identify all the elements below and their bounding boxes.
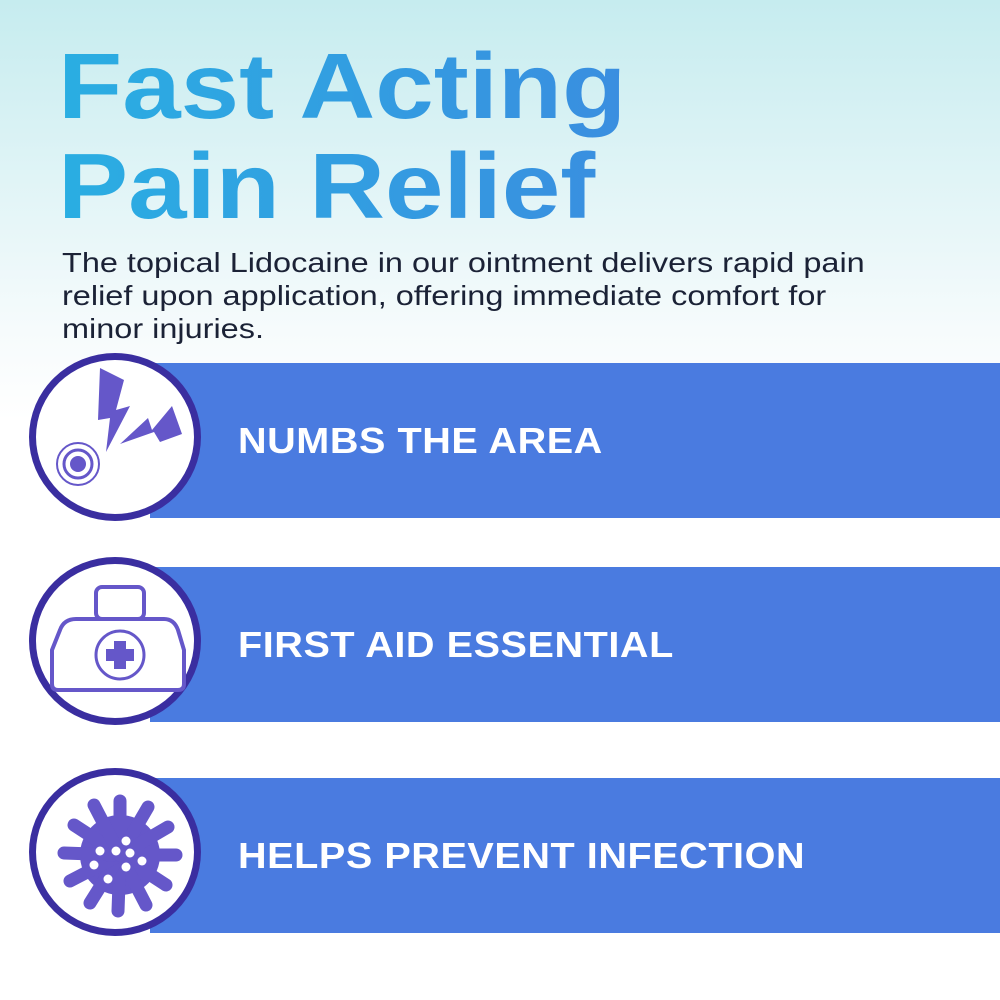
bar: first aid essential [150, 567, 1000, 722]
description text: The topical Lidocaine in our ointment delivers rapid pain [62, 247, 865, 278]
bar: numbs the area: NUMBS THE AREA [238, 420, 603, 460]
icon: first aid kit [29, 557, 201, 725]
bar: helps prevent infection: HELPS PREVENT INFECTION [238, 834, 805, 876]
bar: first aid essential: FIRST AID ESSENTIAL [238, 624, 674, 664]
title [58, 36, 626, 236]
icon: numbing lightning [29, 353, 201, 521]
icon: germ [29, 768, 201, 936]
description text: relief upon application, offering immediate comfort for [62, 280, 826, 311]
bar: helps prevent infection [150, 778, 1000, 933]
title: Pain Relief [58, 134, 595, 238]
title: Fast Acting [58, 34, 626, 138]
description text [62, 247, 865, 344]
bar: numbs the area [150, 363, 1000, 518]
description text: minor injuries. [62, 313, 264, 344]
